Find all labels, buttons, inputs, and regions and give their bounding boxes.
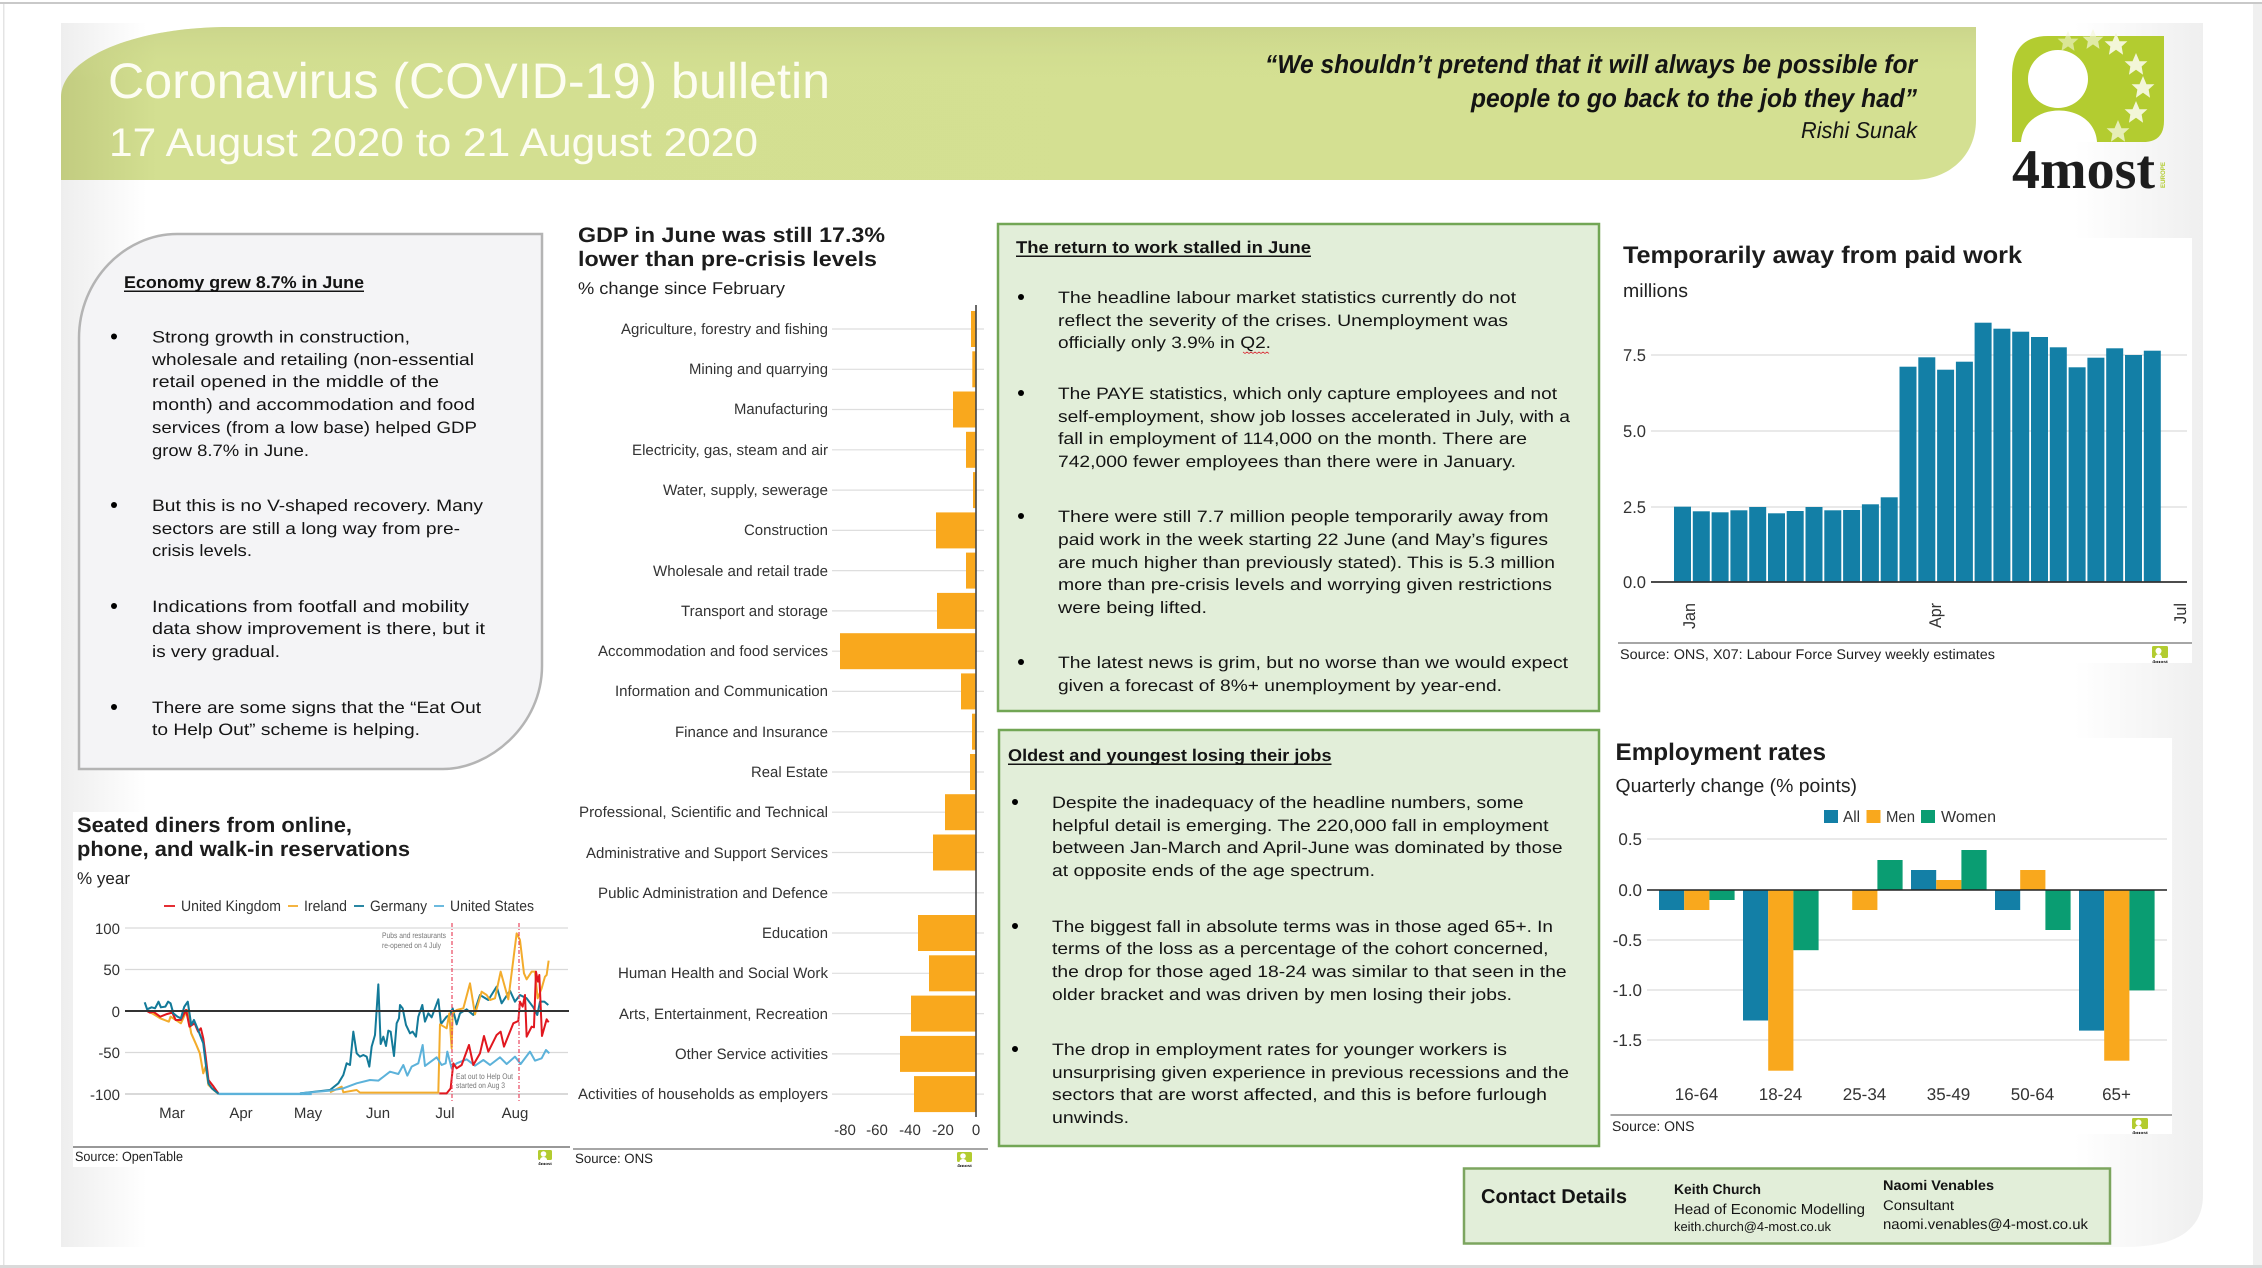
y axis labels: 50 bbox=[103, 962, 120, 979]
contact: Naomi Venables: Consultant bbox=[1883, 1197, 1954, 1213]
bars: all bbox=[1659, 870, 2104, 1031]
annotation: pubs reopened bbox=[382, 931, 446, 950]
chart legend: Ireland bbox=[304, 898, 347, 915]
panel: contact details bbox=[1464, 1168, 2110, 1244]
bars: women bbox=[1709, 850, 2155, 990]
chart subtitle: % change since February bbox=[578, 279, 786, 298]
sector labels: Manufacturing bbox=[734, 401, 828, 418]
annotation: pubs reopened: Pubs and restaurants bbox=[382, 931, 446, 940]
bullet text: latest news: given a forecast of 8%+ unemployment by year-end. bbox=[1058, 677, 1502, 695]
y axis labels: 2.5 bbox=[1623, 498, 1646, 517]
sector labels: Wholesale and retail trade bbox=[653, 563, 828, 580]
chart: temporarily away from paid work bbox=[1615, 238, 2192, 664]
bullet text: PAYE statistics: fall in employment of 114,000 on the month. There are bbox=[1058, 430, 1527, 448]
bullet text: temporarily away: more than pre-crisis levels and worrying given restrictions bbox=[1058, 576, 1552, 594]
chart title bbox=[77, 814, 410, 861]
sector labels: Accommodation and food services bbox=[598, 643, 828, 660]
bullet text: biggest fall: older bracket and was driven by men losing their jobs. bbox=[1052, 986, 1512, 1004]
annotation: eat out to help out: started on Aug 3 bbox=[456, 1081, 505, 1090]
bullet text: footfall and mobility: Indications from footfall and mobility bbox=[152, 598, 470, 616]
bullet text: biggest fall: terms of the loss as a percentage of the cohort concerned, bbox=[1052, 940, 1548, 958]
y axis labels: -50 bbox=[98, 1045, 120, 1062]
icon: small logo: 4most bbox=[2132, 1130, 2149, 1135]
bullet text: younger workers: unsurprising given experience in previous recessions and the bbox=[1052, 1064, 1569, 1082]
y axis labels: 100 bbox=[95, 921, 120, 938]
chart source: Source: ONS, X07: Labour Force Survey weekly estimates bbox=[1620, 646, 1995, 662]
sector labels: Other Service activities bbox=[675, 1046, 828, 1063]
sector labels: Education bbox=[762, 925, 828, 942]
chart: seated diners bbox=[73, 812, 570, 1167]
x axis labels: 35-49 bbox=[1927, 1085, 1970, 1104]
x axis labels: 18-24 bbox=[1759, 1085, 1802, 1104]
sector labels: Real Estate bbox=[751, 764, 828, 781]
y axis labels bbox=[1623, 346, 1646, 592]
bullet text: biggest fall bbox=[1012, 918, 1567, 1004]
icon: 4most logo: 4most bbox=[2012, 139, 2155, 201]
chart source: Source: ONS bbox=[575, 1151, 653, 1166]
sector labels: Administrative and Support Services bbox=[586, 845, 828, 862]
x axis labels bbox=[1675, 1085, 2131, 1104]
icon: small logo: 4most bbox=[957, 1163, 973, 1168]
quote: Rishi Sunak bbox=[1801, 117, 1918, 143]
y axis labels: 0 bbox=[112, 1004, 120, 1021]
icon: small logo: 4most bbox=[538, 1161, 553, 1166]
bullet text: eat out to help out bbox=[111, 699, 481, 739]
sector labels: Arts, Entertainment, Recreation bbox=[619, 1006, 828, 1023]
chart legend: United Kingdom bbox=[181, 898, 281, 915]
panel: economy grew bbox=[79, 234, 542, 769]
bullet text: no V-shaped recovery: But this is no V-shaped recovery. Many bbox=[152, 497, 484, 515]
bullet text: temporarily away: paid work in the week starting 22 June (and May’s figures bbox=[1058, 531, 1548, 549]
sector bars bbox=[840, 311, 976, 1112]
y axis labels: 0.5 bbox=[1618, 830, 1642, 849]
contact: Keith Church: Head of Economic Modelling bbox=[1674, 1202, 1865, 1218]
bullet text: no V-shaped recovery bbox=[111, 497, 484, 560]
icon: 4most logo: EUROPE bbox=[2160, 161, 2167, 188]
chart legend bbox=[1824, 809, 1996, 826]
x axis labels: Apr bbox=[1926, 603, 1945, 628]
x axis labels bbox=[834, 1122, 980, 1139]
bars: men bbox=[1684, 870, 2129, 1071]
bullet text: younger workers: The drop in employment rates for younger workers is bbox=[1052, 1041, 1507, 1059]
x axis labels: Jul bbox=[435, 1105, 455, 1122]
sector labels: Electricity, gas, steam and air bbox=[632, 442, 828, 459]
chart source: Source: ONS bbox=[1612, 1118, 1694, 1134]
heading: return to work: The return to work stalled in June bbox=[1016, 238, 1311, 257]
chart title: Employment rates bbox=[1616, 739, 1826, 766]
annotation: eat out to help out bbox=[456, 1072, 514, 1090]
quote bbox=[1265, 49, 1919, 143]
x axis labels: 65+ bbox=[2102, 1085, 2131, 1104]
bullet text: headline statistics: reflect the severity of the crises. Unemployment was bbox=[1058, 312, 1508, 330]
quote: “We shouldn’t pretend that it will always be possible for bbox=[1265, 49, 1919, 79]
x axis labels: May bbox=[294, 1105, 323, 1122]
y axis labels: 7.5 bbox=[1623, 346, 1646, 365]
header banner bbox=[61, 27, 1976, 180]
bullet text: strong growth: month) and accommodation and food bbox=[152, 396, 475, 414]
sector labels: Information and Communication bbox=[615, 683, 828, 700]
bullet text: strong growth: wholesale and retailing (non-essential bbox=[151, 351, 474, 369]
y axis labels: 5.0 bbox=[1623, 422, 1646, 441]
series lines: May to August bbox=[300, 933, 549, 1093]
annotation: eat out to help out: Eat out to Help Out bbox=[456, 1072, 514, 1081]
bullet text: strong growth: retail opened in the middle of the bbox=[152, 373, 439, 391]
y axis labels: -1.5 bbox=[1613, 1031, 1642, 1050]
sector labels: Professional, Scientific and Technical bbox=[579, 804, 828, 821]
bullet text: headline statistics bbox=[1018, 289, 1516, 354]
icon: small logo bbox=[957, 1152, 973, 1168]
x axis labels: Jul bbox=[2171, 603, 2190, 624]
bullet text: temporarily away: There were still 7.7 million people temporarily away from bbox=[1058, 508, 1548, 526]
y axis labels: -100 bbox=[90, 1087, 120, 1104]
sector labels: Mining and quarrying bbox=[689, 361, 828, 378]
chart legend: Men bbox=[1886, 809, 1915, 826]
chart legend: All bbox=[1843, 809, 1860, 826]
bullet text: footfall and mobility: data show improvement is there, but it bbox=[152, 620, 485, 638]
sector labels: Human Health and Social Work bbox=[618, 965, 828, 982]
chart title: Seated diners from online, bbox=[77, 814, 352, 837]
x axis labels: 0 bbox=[972, 1122, 980, 1139]
bullet text: headline statistics: The headline labour market statistics currently do not bbox=[1058, 289, 1516, 307]
y axis labels: 0.0 bbox=[1623, 573, 1646, 592]
bullet text: no V-shaped recovery: sectors are still a long way from pre- bbox=[152, 520, 460, 538]
bullet text: PAYE statistics bbox=[1018, 385, 1571, 471]
chart: GDP by sector bbox=[573, 224, 988, 1168]
sector labels: Activities of households as employers bbox=[578, 1086, 828, 1103]
x axis labels: -20 bbox=[932, 1122, 954, 1139]
x axis labels: Apr bbox=[229, 1105, 253, 1122]
title: Coronavirus (COVID-19) bulletin bbox=[108, 53, 830, 109]
y axis labels: -0.5 bbox=[1613, 931, 1642, 950]
bullet text: helpful detail: at opposite ends of the age spectrum. bbox=[1052, 862, 1375, 880]
bullet text: younger workers: unwinds. bbox=[1052, 1109, 1129, 1127]
chart title: GDP in June was still 17.3% bbox=[578, 224, 885, 247]
x axis labels: 25-34 bbox=[1843, 1085, 1886, 1104]
sector labels: Transport and storage bbox=[681, 603, 828, 620]
chart legend bbox=[164, 898, 534, 915]
y axis labels bbox=[1613, 830, 1642, 1050]
heading: oldest and youngest: Oldest and youngest losing their jobs bbox=[1008, 746, 1332, 765]
chart source: Source: OpenTable bbox=[75, 1149, 183, 1164]
bullet text: helpful detail: between Jan-March and April-June was dominated by those bbox=[1052, 839, 1563, 857]
contact: Keith Church: Keith Church bbox=[1674, 1181, 1761, 1197]
sector labels: Water, supply, sewerage bbox=[663, 482, 828, 499]
icon: small logo bbox=[538, 1150, 553, 1166]
bullet text: PAYE statistics: 742,000 fewer employees than there were in January. bbox=[1058, 453, 1516, 471]
x axis labels: 50-64 bbox=[2011, 1085, 2054, 1104]
annotation: pubs reopened: re-opened on 4 July bbox=[382, 941, 441, 950]
chart title: phone, and walk-in reservations bbox=[77, 838, 410, 861]
chart subtitle: Quarterly change (% points) bbox=[1616, 776, 1857, 797]
bullet text: temporarily away: are much higher than previously stated). This is 5.3 million bbox=[1058, 554, 1555, 572]
chart title: lower than pre-crisis levels bbox=[578, 248, 877, 271]
x axis labels: -80 bbox=[834, 1122, 856, 1139]
icon: 4most logo bbox=[2012, 29, 2167, 201]
bullet text: temporarily away: were being lifted. bbox=[1057, 599, 1207, 617]
bullet text: eat out to help out: to Help Out” scheme is helping. bbox=[152, 721, 420, 739]
date range: 17 August 2020 to 21 August 2020 bbox=[109, 121, 758, 165]
icon: small logo bbox=[2152, 646, 2169, 664]
contact heading: Contact Details bbox=[1481, 1186, 1627, 1208]
bullet text: latest news: The latest news is grim, but no worse than we would expect bbox=[1058, 654, 1568, 672]
chart: employment rates bbox=[1610, 738, 2172, 1135]
y axis labels: 0.0 bbox=[1618, 881, 1642, 900]
x axis labels: Mar bbox=[159, 1105, 185, 1122]
bullet text: helpful detail: helpful detail is emerging. The 220,000 fall in employment bbox=[1052, 817, 1549, 835]
bullet text: eat out to help out: There are some signs that the “Eat Out bbox=[152, 699, 481, 717]
bullet text: strong growth bbox=[111, 328, 477, 460]
contact: Naomi Venables: naomi.venables@4-most.co.uk bbox=[1883, 1217, 2089, 1233]
bullet text: younger workers bbox=[1012, 1041, 1569, 1127]
bullet text: helpful detail bbox=[1012, 794, 1563, 880]
panel: return to work bbox=[998, 224, 1599, 711]
bullet text: strong growth: Strong growth in construction, bbox=[152, 328, 410, 346]
sector labels bbox=[578, 321, 828, 1103]
sector labels: Construction bbox=[744, 522, 828, 539]
x axis labels bbox=[159, 1105, 528, 1122]
heading: economy grew: Economy grew 8.7% in June bbox=[124, 273, 364, 292]
weekly bars bbox=[1674, 323, 2161, 582]
icon: small logo: 4most bbox=[2152, 659, 2169, 664]
bullet text: headline statistics: officially only 3.9% in Q2. bbox=[1058, 334, 1271, 352]
bullet text: helpful detail: Despite the inadequacy of the headline numbers, some bbox=[1052, 794, 1524, 812]
chart subtitle: % year bbox=[77, 869, 130, 888]
bullet text: no V-shaped recovery: crisis levels. bbox=[152, 542, 252, 560]
bullet text: younger workers: sectors that are worst affected, and this is before furlough bbox=[1052, 1086, 1547, 1104]
bullet text: PAYE statistics: self-employment, show job losses accelerated in July, with a bbox=[1058, 408, 1571, 426]
x axis labels bbox=[1680, 603, 2190, 629]
quote: people to go back to the job they had” bbox=[1470, 83, 1917, 113]
x axis labels: -60 bbox=[866, 1122, 888, 1139]
x axis labels: -40 bbox=[899, 1122, 921, 1139]
bullet text: strong growth: services (from a low base) helped GDP bbox=[152, 419, 477, 437]
x axis labels: Jan bbox=[1680, 603, 1699, 629]
chart title bbox=[578, 224, 885, 271]
y axis labels: -1.0 bbox=[1613, 981, 1642, 1000]
x axis labels: Aug bbox=[502, 1105, 528, 1122]
chart legend: Women bbox=[1941, 809, 1996, 826]
bullet text: PAYE statistics: The PAYE statistics, which only capture employees and not bbox=[1058, 385, 1557, 403]
x axis labels: Jun bbox=[366, 1105, 390, 1122]
sector labels: Public Administration and Defence bbox=[598, 885, 828, 902]
icon: small logo bbox=[2132, 1118, 2149, 1135]
bullet text: strong growth: grow 8.7% in June. bbox=[152, 442, 309, 460]
series lines: March to May bbox=[145, 1002, 312, 1094]
chart title: Temporarily away from paid work bbox=[1623, 242, 2023, 269]
bullet text: biggest fall: the drop for those aged 18-24 was similar to that seen in the bbox=[1052, 963, 1567, 981]
sector labels: Finance and Insurance bbox=[675, 724, 828, 741]
x axis labels: 16-64 bbox=[1675, 1085, 1718, 1104]
bullet text: biggest fall: The biggest fall in absolute terms was in those aged 65+. In bbox=[1052, 918, 1553, 936]
contact: Naomi Venables: Naomi Venables bbox=[1883, 1177, 1994, 1193]
chart legend: Germany bbox=[370, 898, 427, 915]
contact: Naomi Venables bbox=[1883, 1177, 2089, 1233]
bullet text: footfall and mobility bbox=[111, 598, 485, 661]
sector labels: Agriculture, forestry and fishing bbox=[621, 321, 828, 338]
contact: Keith Church bbox=[1674, 1181, 1865, 1234]
y axis labels bbox=[90, 921, 120, 1104]
chart legend: United States bbox=[450, 898, 534, 915]
panel: oldest and youngest bbox=[999, 730, 1599, 1146]
bullet text: temporarily away bbox=[1018, 508, 1555, 617]
contact: Keith Church: keith.church@4-most.co.uk bbox=[1674, 1219, 1831, 1234]
bullet text: latest news bbox=[1018, 654, 1568, 695]
chart subtitle: millions bbox=[1623, 281, 1688, 302]
bullet text: footfall and mobility: is very gradual. bbox=[152, 643, 280, 661]
